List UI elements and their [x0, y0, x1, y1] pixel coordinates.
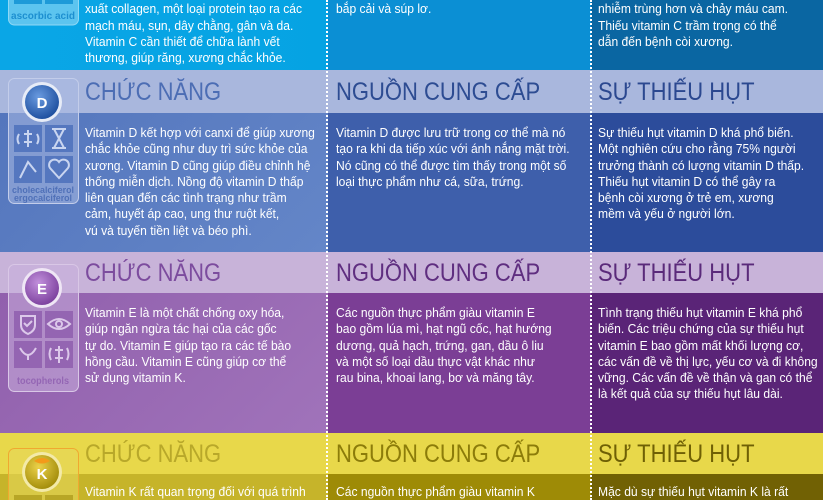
- text: E function: [85, 305, 291, 385]
- panel: C deficiency: [591, 0, 823, 70]
- text: D function: liên quan đến các tình trạng như trầm: [85, 190, 287, 205]
- text: E function: hồng cầu. Vitamin E cũng giúp cơ thể: [85, 354, 286, 369]
- row: vitamin K: [0, 433, 823, 500]
- text: D sources: tạo ra khi da tiếp xúc với ánh nắng mặt trời.: [336, 141, 570, 156]
- text: D function: Vitamin D kết hợp với canxi để giúp xương: [85, 125, 315, 140]
- icon: vitamin E panel: E: [37, 281, 47, 298]
- text: C function: Vitamin C cần thiết để chữa lành vết: [85, 34, 280, 49]
- panel: D deficiency body: [591, 113, 823, 252]
- text: C deficiency: Thiếu vitamin C trầm trọng có thể: [598, 18, 777, 33]
- text: C deficiency: [598, 1, 788, 49]
- text: D function: cảm, huyết áp cao, ung thư ruột kết,: [85, 206, 279, 221]
- heading: E sources: NGUỒN CUNG CẤP: [336, 259, 540, 287]
- header band E: [0, 252, 823, 293]
- text: E function: Vitamin E là một chất chống oxy hóa,: [85, 305, 284, 320]
- heading: D deficiency: SỰ THIẾU HỤT: [598, 78, 755, 106]
- text: E deficiency: biến. Các triệu chứng của sự thiếu hụt: [598, 321, 804, 336]
- text: E deficiency: là kết quả của sự thiếu hụt lâu dài.: [598, 386, 783, 401]
- text: D sources: Nó cũng có thể được tìm thấy trong một số: [336, 158, 566, 173]
- icon: vitamin E panel: [8, 264, 79, 392]
- row: vitamin E: [0, 252, 823, 433]
- panel: K sources body: [328, 474, 591, 500]
- text: C sources: bắp cải và súp lơ.: [336, 1, 431, 16]
- text: E deficiency: [598, 305, 818, 401]
- panel: E function body: [0, 293, 328, 433]
- text: D deficiency: trưởng thành có lượng vitamin D thấp.: [598, 158, 804, 173]
- panel: D function body: [0, 113, 328, 252]
- icon: vitamin C panel: [8, 0, 79, 26]
- text: C deficiency: dẫn đến bệnh còi xương.: [598, 34, 733, 49]
- icon: vitamin E panel: tocopherols: [17, 376, 69, 387]
- header band K: [0, 433, 823, 474]
- heading: D sources: NGUỒN CUNG CẤP: [336, 78, 540, 106]
- text: D deficiency: Một nghiên cứu cho rằng 75% người: [598, 141, 796, 156]
- heading: E deficiency: SỰ THIẾU HỤT: [598, 259, 755, 287]
- icon: vitamin D panel: [8, 78, 79, 204]
- text: E sources: và một số loại dầu thực vật khác như: [336, 354, 535, 369]
- text: E sources: [336, 305, 552, 385]
- row: vitamin C: [0, 0, 823, 70]
- panel: D sources body: [328, 113, 591, 252]
- text: C function: xuất collagen, một loại protein tạo ra các: [85, 1, 302, 16]
- text: K function: Vitamin K rất quan trọng đối với quá trình: [85, 484, 306, 499]
- text: D function: chắc khỏe cũng như duy trì sức khỏe của: [85, 141, 308, 156]
- text: D deficiency: [598, 125, 804, 221]
- text: E sources: rau bina, khoai lang, bơ và măng tây.: [336, 370, 535, 385]
- text: E function: giúp ngăn ngừa tác hại của các gốc: [85, 321, 277, 336]
- header band D: [0, 70, 823, 113]
- text: D sources: [336, 125, 570, 189]
- text: E sources: Các nguồn thực phẩm giàu vitamin E: [336, 305, 535, 320]
- panel: C sources: [328, 0, 591, 70]
- text: E deficiency: vitamin E bao gồm mất khối lượng cơ,: [598, 338, 803, 353]
- text: D function: [85, 125, 315, 238]
- panel: C function: [0, 0, 328, 70]
- icon: vitamin D panel: cholecalciferol: [12, 185, 74, 196]
- heading: E function: CHỨC NĂNG: [85, 259, 221, 287]
- text: E deficiency: vững. Các vấn đề về thận và gan có thể: [598, 370, 812, 385]
- heading: K sources: NGUỒN CUNG CẤP: [336, 440, 540, 468]
- text: E sources: bao gồm lúa mì, hạt ngũ cốc, hạt hướng: [336, 321, 552, 336]
- icon: vitamin C panel: ascorbic acid: [11, 11, 75, 22]
- text: D sources: loại thực phẩm như cá, sữa, trứng.: [336, 174, 524, 189]
- text: E function: sử dụng vitamin K.: [85, 370, 186, 385]
- heading: K function: CHỨC NĂNG: [85, 440, 221, 468]
- panel: K function body: [0, 474, 328, 500]
- icon: vitamin K panel: [8, 448, 79, 500]
- text: K deficiency: Mặc dù sự thiếu hụt vitamin K là rất: [598, 484, 788, 499]
- panel: K deficiency body: [591, 474, 823, 500]
- text: E sources: dương, quả hạch, trứng, gan, dầu ô liu: [336, 338, 544, 353]
- text: C function: mạch máu, sụn, dây chằng, gân và da.: [85, 18, 293, 33]
- row: vitamin D: [0, 70, 823, 252]
- text: D deficiency: bệnh còi xương ở trẻ em, xương: [598, 190, 774, 205]
- text: E deficiency: các vấn đề về thị lực, yếu cơ và đi không: [598, 354, 818, 369]
- text: C deficiency: nhiễm trùng hơn và chảy máu cam.: [598, 1, 788, 16]
- text: C function: thương, giúp răng, xương chắc khỏe.: [85, 50, 286, 65]
- text: D deficiency: Sự thiếu hụt vitamin D khá phổ biến.: [598, 125, 794, 140]
- text: D function: vú và tuyến tiền liệt và béo phì.: [85, 223, 252, 238]
- text: K sources: Các nguồn thực phẩm giàu vitamin K: [336, 484, 535, 499]
- heading: K deficiency: SỰ THIẾU HỤT: [598, 440, 755, 468]
- text: C function: [85, 1, 302, 65]
- text: D deficiency: mềm và yếu ở người lớn.: [598, 206, 735, 221]
- text: E deficiency: Tình trạng thiếu hụt vitamin E khá phổ: [598, 305, 802, 320]
- heading: D function: CHỨC NĂNG: [85, 78, 221, 106]
- text: D deficiency: Thiếu hụt vitamin D có thể gây ra: [598, 174, 775, 189]
- panel: E deficiency body: [591, 293, 823, 433]
- icon: vitamin D panel: D: [37, 95, 48, 112]
- icon: vitamin D panel: ergocalciferol: [14, 193, 72, 204]
- icon: vitamin K panel: K: [37, 466, 48, 483]
- text: D sources: Vitamin D được lưu trữ trong cơ thể mà nó: [336, 125, 565, 140]
- text: D function: thống miễn dịch. Nồng độ vitamin D thấp: [85, 174, 303, 189]
- text: E function: tự do. Vitamin E giúp tạo ra các tế bào: [85, 338, 291, 353]
- text: D function: xương. Vitamin D cũng giúp điều chỉnh hệ: [85, 158, 310, 173]
- panel: E sources body: [328, 293, 591, 433]
